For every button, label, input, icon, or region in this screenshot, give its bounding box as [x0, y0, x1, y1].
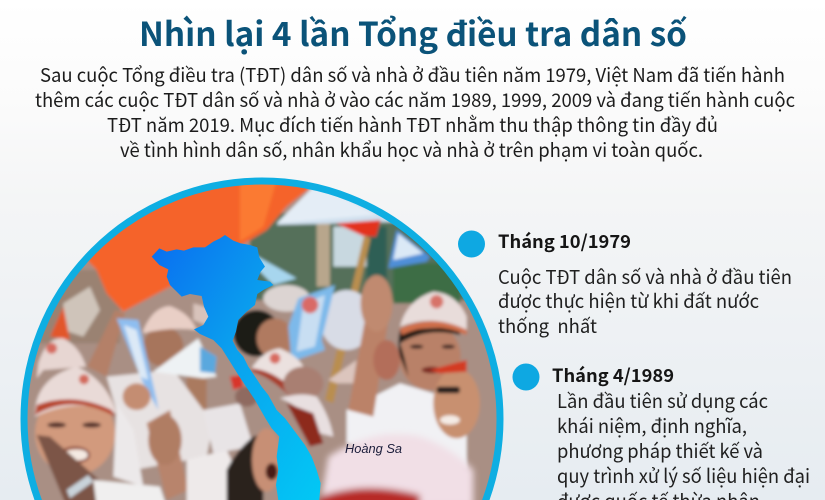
red pennant [336, 220, 381, 237]
text 1989: quy trình xử lý số liệu hiện đại [557, 462, 810, 489]
text 1979 [498, 263, 792, 339]
timeline entry 1989 [512, 362, 810, 500]
cap far [328, 360, 357, 383]
center cap group [143, 327, 183, 367]
text 1989 [557, 387, 810, 500]
heading 1989: Tháng 4/1989 [552, 362, 674, 388]
right lower face [433, 368, 480, 438]
text 1979: thống nhất [498, 312, 597, 339]
circle ring [24, 181, 500, 500]
pale flag [275, 199, 394, 228]
text 1979: Cuộc TĐT dân số và nhà ở đầu tiên [498, 263, 792, 290]
central face behind map [227, 433, 263, 500]
crowd photo [28, 184, 496, 500]
dot 1989 [512, 364, 540, 390]
arm left [87, 310, 125, 377]
text 1989: khái niệm, định nghĩa, [557, 412, 747, 439]
orange flag [87, 184, 310, 313]
intro text: thêm các cuộc TĐT dân số và nhà ở vào các năm 1989, 1999, 2009 và đang tiến hành cuộc [35, 86, 795, 113]
blue card flag [288, 285, 335, 362]
timeline entry 1979 [458, 228, 792, 339]
heading 1979: Tháng 10/1979 [498, 228, 631, 254]
text 1979: được thực hiện từ khi đất nước [498, 287, 759, 314]
text 1989: Lần đầu tiên sử dụng các [557, 387, 768, 414]
raised fists [123, 383, 151, 410]
label: Hoàng Sa: Hoàng Sa [345, 441, 402, 456]
foreground blurred cap [320, 434, 473, 500]
pole [325, 236, 371, 403]
photo circle with map [0, 170, 500, 500]
intro text: về tình hình dân số, nhân khẩu học và nhà ở trên phạm vi toàn quốc. [120, 136, 703, 163]
caps mid-right [252, 348, 305, 385]
dark hair mid [233, 310, 280, 357]
triangle flag [153, 338, 217, 378]
right man [347, 383, 467, 470]
intro text [35, 61, 795, 163]
intro text: TĐT năm 2019. Mục đích tiến hành TĐT nhằm thu thập thông tin đầy đủ [107, 111, 718, 138]
Vietnam map silhouette [152, 235, 321, 500]
small top flag [388, 230, 430, 268]
crowd caps back [320, 290, 373, 350]
left cap [37, 338, 86, 378]
long flag [117, 318, 158, 410]
title: Nhìn lại 4 lần Tổng điều tra dân số [139, 8, 687, 56]
text 1989: phương pháp thiết kế và [557, 437, 763, 464]
dot 1979 [458, 230, 485, 258]
front girl [34, 404, 116, 473]
intro text: Sau cuộc Tổng điều tra (TĐT) dân số và nhà ở đầu tiên năm 1979, Việt Nam đã tiến hành [40, 61, 785, 88]
